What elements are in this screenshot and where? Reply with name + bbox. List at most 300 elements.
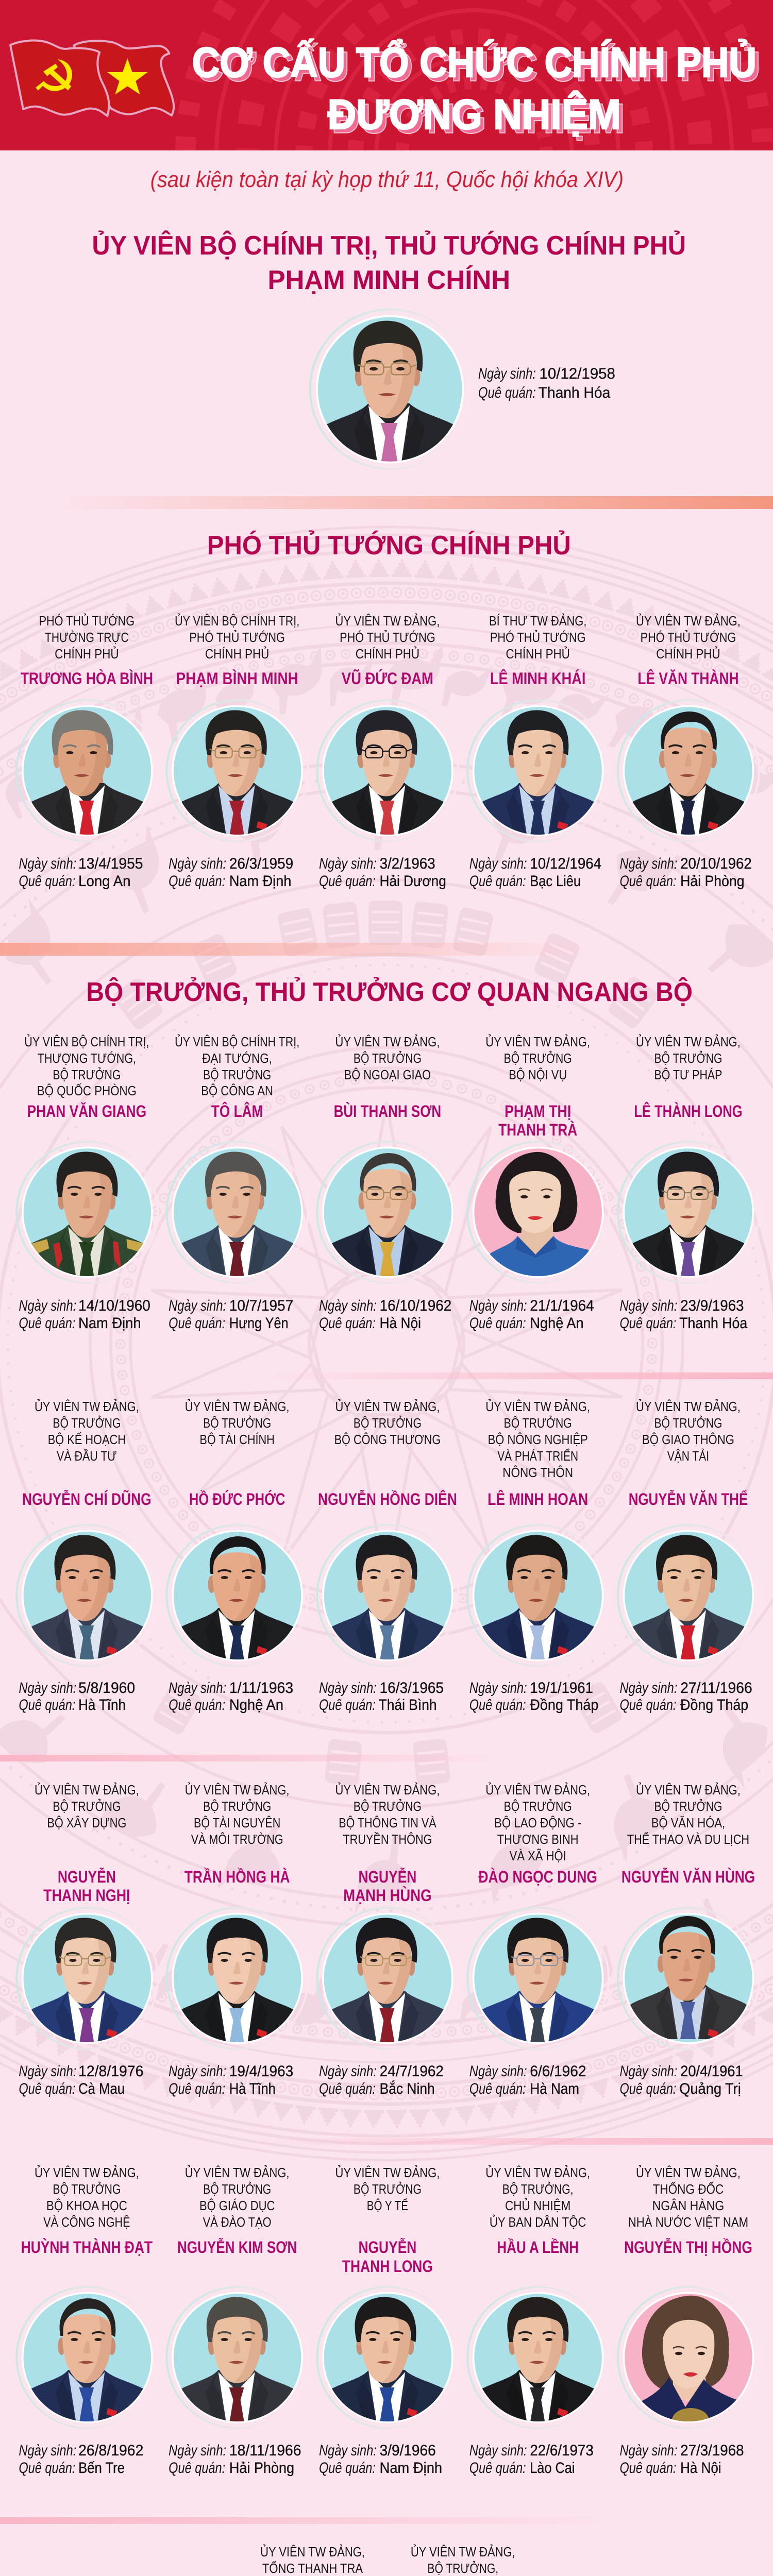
name: TRẦN HỒNG HÀ xyxy=(184,1867,290,1886)
birth date and hometown: Quê quán: xyxy=(619,1314,676,1332)
role: BỘ TRƯỞNG xyxy=(203,1798,271,1814)
role: ỦY VIÊN TW ĐẢNG, xyxy=(35,1782,139,1798)
role: ỦY VIÊN BỘ CHÍNH TRỊ, xyxy=(24,1033,149,1049)
role: TỔNG THANH TRA xyxy=(262,2560,363,2576)
name: THANH TRÀ xyxy=(498,1121,577,1139)
birth date and hometown: Hà Nội xyxy=(380,1314,421,1332)
birth date and hometown: Quê quán: xyxy=(19,1314,75,1332)
birth date and hometown: Quê quán: xyxy=(619,872,676,890)
role: ĐẠI TƯỚNG, xyxy=(202,1050,272,1066)
birth date and hometown: 16/3/1965 xyxy=(380,1679,444,1697)
role: BỘ TRƯỞNG xyxy=(504,1050,572,1066)
birth date and hometown: Ngày sinh: xyxy=(169,855,226,872)
role xyxy=(485,2164,590,2230)
role: BỘ TRƯỞNG xyxy=(53,1415,121,1431)
role xyxy=(627,1782,749,1847)
person: Nguyễn Mạnh Hùng xyxy=(317,1782,458,2097)
role: ỦY VIÊN TW ĐẢNG, xyxy=(335,613,440,629)
role: BỘ THÔNG TIN VÀ xyxy=(339,1815,436,1831)
birth date and hometown: Hải Phòng xyxy=(229,2459,294,2477)
birth date and hometown: 13/4/1955 xyxy=(78,855,143,872)
role: BỘ TRƯỞNG, xyxy=(502,2181,574,2197)
birth date and hometown: 27/11/1966 xyxy=(680,1679,752,1697)
role: ỦY VIÊN TW ĐẢNG, xyxy=(335,1398,440,1414)
role: BỘ TRƯỞNG xyxy=(654,1415,722,1431)
birth date and hometown: Lào Cai xyxy=(530,2459,575,2477)
name: HỒ ĐỨC PHỚC xyxy=(189,1489,285,1509)
role xyxy=(175,1033,299,1098)
birth date and hometown xyxy=(469,2062,586,2097)
role: ỦY VIÊN TW ĐẢNG, xyxy=(185,2164,290,2180)
person: Nguyễn Thanh Long xyxy=(317,2164,458,2477)
birth date and hometown xyxy=(169,2442,301,2477)
birth date and hometown: Hà Nam xyxy=(530,2080,579,2097)
birth date and hometown: Hải Phòng xyxy=(680,872,745,890)
person: Huỳnh Thành Đạt xyxy=(16,2164,158,2477)
birth date and hometown: Ngày sinh: xyxy=(19,2442,76,2459)
role: ỦY VIÊN TW ĐẢNG, xyxy=(335,1782,440,1798)
role: ỦY VIÊN BỘ CHÍNH TRỊ, xyxy=(175,613,299,629)
role: BỘ TÀI NGUYÊN xyxy=(194,1815,280,1831)
birth date and hometown xyxy=(619,1679,752,1714)
name: NGUYỄN VĂN HÙNG xyxy=(621,1867,755,1886)
birth date and hometown: 10/12/1964 xyxy=(530,855,601,872)
role: ỦY VIÊN TW ĐẢNG, xyxy=(485,1033,590,1049)
role: CHÍNH PHỦ xyxy=(356,646,419,662)
role: ỦY VIÊN TW ĐẢNG, xyxy=(335,1033,440,1049)
role: PHÓ THỦ TƯỚNG xyxy=(641,629,736,645)
birth date and hometown xyxy=(319,2062,444,2097)
role: CHÍNH PHỦ xyxy=(205,646,269,662)
role xyxy=(485,1782,590,1863)
role: BỘ CÔNG AN xyxy=(201,1083,273,1098)
person: Nguyễn Thị Hồng xyxy=(618,2164,759,2477)
role: BỘ NGOẠI GIAO xyxy=(344,1067,431,1082)
birth date and hometown: Hà Nội xyxy=(680,2459,721,2477)
birth date and hometown xyxy=(319,1679,444,1714)
icon: party flag and national flag xyxy=(10,41,174,116)
person: Đoàn Hồng Phong xyxy=(242,2544,383,2576)
birth date and hometown: 26/3/1959 xyxy=(229,855,293,872)
person: Hồ Đức Phớc xyxy=(167,1398,308,1714)
role: CHÍNH PHỦ xyxy=(656,646,720,662)
portrait xyxy=(16,2287,158,2428)
birth date and hometown: Ngày sinh: xyxy=(469,1297,527,1314)
birth date and hometown: Thái Bình xyxy=(379,1696,437,1714)
role: BỘ TRƯỞNG xyxy=(203,1066,271,1082)
name: LÊ THÀNH LONG xyxy=(634,1101,743,1121)
birth date and hometown: Bạc Liêu xyxy=(530,872,581,890)
birth date and hometown: Ngày sinh: xyxy=(169,1679,226,1697)
portrait xyxy=(618,2287,759,2433)
birth date and hometown: Ngày sinh: xyxy=(619,2062,677,2080)
birth date and hometown: 3/2/1963 xyxy=(380,855,435,872)
birth date and hometown: Ngày sinh: xyxy=(319,2062,377,2080)
birth date and hometown: Quê quán: xyxy=(169,1314,225,1332)
portrait xyxy=(317,1908,458,2049)
role: TRUYỀN THÔNG xyxy=(343,1832,432,1847)
background pattern: bronze drum xyxy=(0,527,773,2160)
birth date and hometown: Thanh Hóa xyxy=(679,1314,748,1332)
birth date and hometown: Quảng Trị xyxy=(679,2080,741,2097)
role: VÀ ĐẦU TƯ xyxy=(57,1448,117,1464)
birth date and hometown: Quê quán: xyxy=(469,2080,526,2097)
portrait xyxy=(317,2287,458,2428)
person: Lê Văn Thành xyxy=(618,613,759,890)
role: BỘ KHOA HỌC xyxy=(46,2198,127,2213)
role: BỘ TRƯỞNG xyxy=(53,1066,121,1082)
name: NGUYỄN xyxy=(358,1868,416,1886)
birth date and hometown: Nghệ An xyxy=(229,1696,283,1714)
name: PHẠM THỊ xyxy=(505,1102,571,1121)
role: THƯƠNG BINH xyxy=(497,1833,579,1847)
birth date and hometown xyxy=(619,2062,743,2097)
name: NGUYỄN HỒNG DIÊN xyxy=(318,1489,457,1509)
role: BỘ TRƯỞNG, xyxy=(427,2560,498,2576)
birth date and hometown: Phạm Minh Chính xyxy=(478,365,615,401)
person: Nguyễn Hồng Diên xyxy=(317,1398,458,1714)
role xyxy=(335,2164,440,2213)
birth date and hometown: Ngày sinh: xyxy=(19,1679,76,1697)
birth date and hometown: Ngày sinh: xyxy=(19,1297,76,1314)
birth date and hometown: 24/7/1962 xyxy=(380,2062,444,2080)
role: BỘ TRƯỞNG xyxy=(203,2181,271,2197)
role: BỘ TRƯỞNG xyxy=(354,1415,422,1431)
name: NGUYỄN CHÍ DŨNG xyxy=(22,1489,152,1509)
role: ỦY VIÊN TW ĐẢNG, xyxy=(485,1398,590,1414)
birth date and hometown xyxy=(19,855,143,890)
birth date and hometown: Phạm Minh Chính: Quê quán: xyxy=(478,384,536,401)
role: BỘ KẾ HOẠCH xyxy=(48,1432,126,1447)
role: VÀ PHÁT TRIỂN xyxy=(497,1448,578,1464)
role xyxy=(185,2164,290,2230)
role: BỘ TRƯỞNG xyxy=(53,2181,121,2197)
birth date and hometown xyxy=(319,1297,451,1332)
name: HUỲNH THÀNH ĐẠT xyxy=(21,2238,153,2257)
role: ỦY VIÊN TW ĐẢNG, xyxy=(485,1782,590,1798)
role: BỘ TRƯỞNG xyxy=(354,2181,422,2197)
person: Trương Hòa Bình xyxy=(16,613,158,890)
birth date and hometown: 3/9/1966 xyxy=(380,2442,436,2459)
role: VÀ XÃ HỘI xyxy=(510,1848,566,1863)
name: NGUYỄN KIM SƠN xyxy=(177,2238,297,2257)
birth date and hometown: Quê quán: xyxy=(169,1696,225,1714)
birth date and hometown: Ngày sinh: xyxy=(469,2442,527,2459)
name: VŨ ĐỨC ĐAM xyxy=(342,669,433,688)
birth date and hometown xyxy=(619,855,752,890)
portrait xyxy=(317,1142,458,1283)
role: THƯỜNG TRỰC xyxy=(45,630,129,645)
birth date and hometown xyxy=(469,2442,594,2477)
name: THANH NGHỊ xyxy=(43,1886,130,1905)
birth date and hometown: 22/6/1973 xyxy=(530,2442,594,2459)
birth date and hometown: Quê quán: xyxy=(19,872,75,890)
role xyxy=(485,1398,590,1480)
birth date and hometown: Quê quán: xyxy=(169,2459,225,2477)
role: CHỦ NHIỆM xyxy=(505,2197,570,2213)
person: Phan Văn Giang xyxy=(16,1033,158,1332)
birth date and hometown xyxy=(469,1679,598,1714)
name: ĐÀO NGỌC DUNG xyxy=(478,1868,597,1886)
birth date and hometown: Đồng Tháp xyxy=(530,1696,598,1714)
person: Đào Ngọc Dung xyxy=(467,1782,609,2097)
birth date and hometown xyxy=(19,1297,150,1332)
birth date and hometown xyxy=(319,2442,442,2477)
birth date and hometown: Ngày sinh: xyxy=(19,855,76,872)
role: NÔNG THÔN xyxy=(502,1465,573,1480)
title: CƠ CẤU TỔ CHỨC CHÍNH PHỦ xyxy=(192,39,757,86)
name: BÙI THANH SƠN xyxy=(334,1101,441,1121)
birth date and hometown: Ngày sinh: xyxy=(169,2442,226,2459)
role: BỘ TRƯỞNG xyxy=(354,1050,422,1066)
name: HẦU A LỀNH xyxy=(497,2238,579,2257)
portrait xyxy=(618,1908,759,2049)
birth date and hometown: 16/10/1962 xyxy=(380,1297,451,1314)
role: PHÓ THỦ TƯỚNG xyxy=(490,629,585,645)
birth date and hometown: Ngày sinh: xyxy=(469,1679,527,1697)
birth date and hometown: Quê quán: xyxy=(619,2459,676,2477)
birth date and hometown: Bắc Ninh xyxy=(380,2080,435,2097)
birth date and hometown: Đồng Tháp xyxy=(680,1696,748,1714)
person: Vũ Đức Đam xyxy=(317,613,458,890)
birth date and hometown xyxy=(169,855,293,890)
birth date and hometown: 21/1/1964 xyxy=(530,1297,594,1314)
name: LÊ MINH KHÁI xyxy=(490,669,585,688)
name: MẠNH HÙNG xyxy=(343,1886,432,1905)
birth date and hometown: Hà Tĩnh xyxy=(78,1696,126,1714)
role: ỦY BAN DÂN TỘC xyxy=(490,2214,586,2230)
name: NGUYỄN VĂN THỂ xyxy=(629,1490,748,1509)
birth date and hometown xyxy=(619,1297,748,1332)
person: Nguyễn Văn Thể xyxy=(618,1398,759,1714)
role: BỘ TRƯỞNG xyxy=(654,1798,722,1814)
role: BỘ TRƯỞNG xyxy=(53,1798,121,1814)
role: BỘ Y TẾ xyxy=(367,2198,408,2213)
birth date and hometown: Quê quán: xyxy=(319,872,376,890)
name: TRƯƠNG HÒA BÌNH xyxy=(21,669,153,688)
role: ỦY VIÊN TW ĐẢNG, xyxy=(411,2544,515,2560)
name xyxy=(342,2238,433,2276)
birth date and hometown: Long An xyxy=(78,872,131,890)
person: Trần Văn Sơn xyxy=(393,2544,534,2576)
heading: prime minister: ỦY VIÊN BỘ CHÍNH TRỊ, THỦ TƯỚNG CHÍNH PHỦ xyxy=(92,230,686,260)
role: CHÍNH PHỦ xyxy=(506,646,570,662)
person: Nguyễn Văn Hùng xyxy=(618,1782,759,2097)
birth date and hometown: Ngày sinh: xyxy=(619,2442,677,2459)
portrait xyxy=(16,1142,158,1283)
person: Hầu A Lềnh xyxy=(467,2164,609,2477)
portrait xyxy=(167,2287,308,2428)
role: ỦY VIÊN TW ĐẢNG, xyxy=(185,1782,290,1798)
birth date and hometown: Quê quán: xyxy=(469,1314,526,1332)
role xyxy=(636,613,741,662)
role: THỐNG ĐỐC xyxy=(653,2181,724,2197)
person: Lê Minh Hoan xyxy=(467,1398,609,1714)
dividers xyxy=(0,496,773,2524)
birth date and hometown: Nam Định xyxy=(380,2459,442,2477)
role: ỦY VIÊN TW ĐẢNG, xyxy=(185,1398,290,1414)
portrait xyxy=(167,1142,308,1283)
name xyxy=(43,1868,130,1905)
birth date and hometown: Phạm Minh Chính: Thanh Hóa xyxy=(539,384,611,401)
birth date and hometown: 23/9/1963 xyxy=(680,1297,744,1314)
birth date and hometown xyxy=(19,2442,143,2477)
birth date and hometown: Nghệ An xyxy=(530,1314,584,1332)
birth date and hometown xyxy=(469,855,601,890)
role xyxy=(636,1398,741,1464)
header banner xyxy=(0,0,773,150)
birth date and hometown: Quê quán: xyxy=(319,1696,376,1714)
role: THỂ THAO VÀ DU LỊCH xyxy=(627,1832,749,1847)
role: BỘ TRƯỞNG xyxy=(504,1798,572,1814)
person: Phạm Bình Minh xyxy=(167,613,308,890)
birth date and hometown xyxy=(319,855,446,890)
person: Nguyễn Chí Dũng xyxy=(16,1398,158,1714)
name: LÊ VĂN THÀNH xyxy=(637,669,739,688)
birth date and hometown: 26/8/1962 xyxy=(78,2442,143,2459)
person: Trần Hồng Hà xyxy=(167,1782,308,2097)
birth date and hometown: Quê quán: xyxy=(469,1696,526,1714)
role xyxy=(395,2544,531,2576)
portrait xyxy=(618,1525,759,1666)
birth date and hometown: Quê quán: xyxy=(319,1314,376,1332)
person: Tô Lâm xyxy=(167,1033,308,1332)
name: TÔ LÂM xyxy=(211,1101,263,1121)
role: BỘ CÔNG THƯƠNG xyxy=(334,1432,441,1447)
role: BỘ GIÁO DỤC xyxy=(199,2198,275,2213)
birth date and hometown: Quê quán: xyxy=(169,2080,225,2097)
birth date and hometown: Hưng Yên xyxy=(229,1314,289,1332)
birth date and hometown: Hà Tĩnh xyxy=(229,2080,276,2097)
person: Phạm Thị Thanh Trà xyxy=(467,1033,609,1332)
role: BỘ QUỐC PHÒNG xyxy=(37,1082,137,1098)
birth date and hometown: Ngày sinh: xyxy=(619,1679,677,1697)
role: VÀ CÔNG NGHỆ xyxy=(43,2214,130,2230)
role xyxy=(335,613,440,662)
birth date and hometown: Ngày sinh: xyxy=(169,1297,226,1314)
portrait xyxy=(167,1908,308,2049)
role: BỘ NỘI VỤ xyxy=(509,1067,567,1082)
birth date and hometown: Quê quán: xyxy=(319,2459,376,2477)
role: BỘ TƯ PHÁP xyxy=(654,1067,722,1082)
role xyxy=(335,1033,440,1082)
role xyxy=(35,1398,139,1464)
role: VÀ ĐÀO TẠO xyxy=(203,2214,272,2230)
birth date and hometown: Ngày sinh: xyxy=(469,2062,527,2080)
portrait xyxy=(317,1525,458,1666)
role xyxy=(24,1033,149,1098)
role: PHÓ THỦ TƯỚNG xyxy=(39,613,135,629)
role xyxy=(35,1782,139,1831)
role: ỦY VIÊN TW ĐẢNG, xyxy=(260,2544,365,2560)
role: ỦY VIÊN TW ĐẢNG, xyxy=(485,2164,590,2180)
role: BỘ GIAO THÔNG xyxy=(642,1432,734,1447)
role: VÀ MÔI TRƯỜNG xyxy=(191,1832,283,1847)
role xyxy=(260,2544,365,2576)
role xyxy=(175,613,299,662)
birth date and hometown: Nam Định xyxy=(229,872,291,890)
portrait xyxy=(467,700,609,841)
portrait xyxy=(16,700,158,841)
role: PHÓ THỦ TƯỚNG xyxy=(340,629,435,645)
birth date and hometown: Quê quán: xyxy=(169,872,225,890)
portrait xyxy=(467,1142,609,1283)
birth date and hometown: 12/8/1976 xyxy=(78,2062,143,2080)
heading: prime minister xyxy=(92,230,686,295)
name: THANH LONG xyxy=(342,2257,433,2276)
name: NGUYỄN xyxy=(58,1868,116,1886)
birth date and hometown: Ngày sinh: xyxy=(319,855,377,872)
birth date and hometown xyxy=(19,2062,143,2097)
role xyxy=(35,2164,139,2230)
portrait xyxy=(618,1142,759,1283)
name: LÊ MINH HOAN xyxy=(488,1489,588,1509)
birth date and hometown: Ngày sinh: xyxy=(619,855,677,872)
birth date and hometown xyxy=(169,1297,293,1332)
name: PHAN VĂN GIANG xyxy=(27,1102,146,1121)
portrait xyxy=(317,700,458,841)
birth date and hometown: 20/10/1962 xyxy=(680,855,752,872)
birth date and hometown xyxy=(169,2062,293,2097)
heading: ministers: BỘ TRƯỞNG, THỦ TRƯỞNG CƠ QUAN NGANG BỘ xyxy=(86,976,693,1007)
birth date and hometown: Quê quán: xyxy=(19,1696,75,1714)
birth date and hometown: 18/11/1966 xyxy=(229,2442,301,2459)
role xyxy=(485,1033,590,1082)
title xyxy=(192,39,761,142)
portrait: Phạm Minh Chính xyxy=(310,310,469,469)
role: BỘ VĂN HÓA, xyxy=(651,1815,725,1831)
subtitle: (sau kiện toàn tại kỳ họp thứ 11, Quốc hội khóa XIV) xyxy=(150,167,624,192)
birth date and hometown: Quê quán: xyxy=(619,1696,676,1714)
role: ỦY VIÊN TW ĐẢNG, xyxy=(636,2164,741,2180)
birth date and hometown xyxy=(169,1679,293,1714)
birth date and hometown: 20/4/1961 xyxy=(680,2062,743,2080)
birth date and hometown: 1/11/1963 xyxy=(229,1679,293,1697)
birth date and hometown: Ngày sinh: xyxy=(619,1297,677,1314)
birth date and hometown: Ngày sinh: xyxy=(319,2442,377,2459)
role xyxy=(185,1782,290,1847)
birth date and hometown: Nam Định xyxy=(78,1314,141,1332)
name: NGUYỄN xyxy=(358,2238,416,2257)
role: ỦY VIÊN TW ĐẢNG, xyxy=(636,1398,741,1414)
role: PHÓ THỦ TƯỚNG xyxy=(189,629,285,645)
role: BỘ TRƯỞNG xyxy=(654,1050,722,1066)
birth date and hometown xyxy=(619,2442,744,2477)
person: Nguyễn Thanh Nghị xyxy=(16,1782,158,2097)
birth date and hometown: Quê quán: xyxy=(19,2459,75,2477)
birth date and hometown: Hải Dương xyxy=(380,872,446,890)
birth date and hometown xyxy=(19,1679,135,1714)
birth date and hometown: Cà Mau xyxy=(78,2080,125,2097)
role: BỘ TRƯỞNG xyxy=(203,1415,271,1431)
role: BỘ TRƯỞNG xyxy=(504,1415,572,1431)
birth date and hometown: 27/3/1968 xyxy=(680,2442,744,2459)
birth date and hometown: Ngày sinh: xyxy=(169,2062,226,2080)
role: VẬN TẢI xyxy=(667,1448,709,1464)
role: ỦY VIÊN TW ĐẢNG, xyxy=(335,2164,440,2180)
portrait xyxy=(467,1525,609,1666)
birth date and hometown: Phạm Minh Chính: Ngày sinh: xyxy=(478,365,536,382)
birth date and hometown: Quê quán: xyxy=(469,2459,526,2477)
person: Lê Minh Khái xyxy=(467,613,609,890)
person: Lê Thành Long xyxy=(618,1033,759,1332)
portrait xyxy=(167,700,308,841)
role xyxy=(335,1782,440,1847)
role: ỦY VIÊN TW ĐẢNG, xyxy=(636,1033,741,1049)
birth date and hometown: 14/10/1960 xyxy=(78,1297,150,1314)
birth date and hometown: Quê quán: xyxy=(19,2080,75,2097)
birth date and hometown: Ngày sinh: xyxy=(319,1679,377,1697)
